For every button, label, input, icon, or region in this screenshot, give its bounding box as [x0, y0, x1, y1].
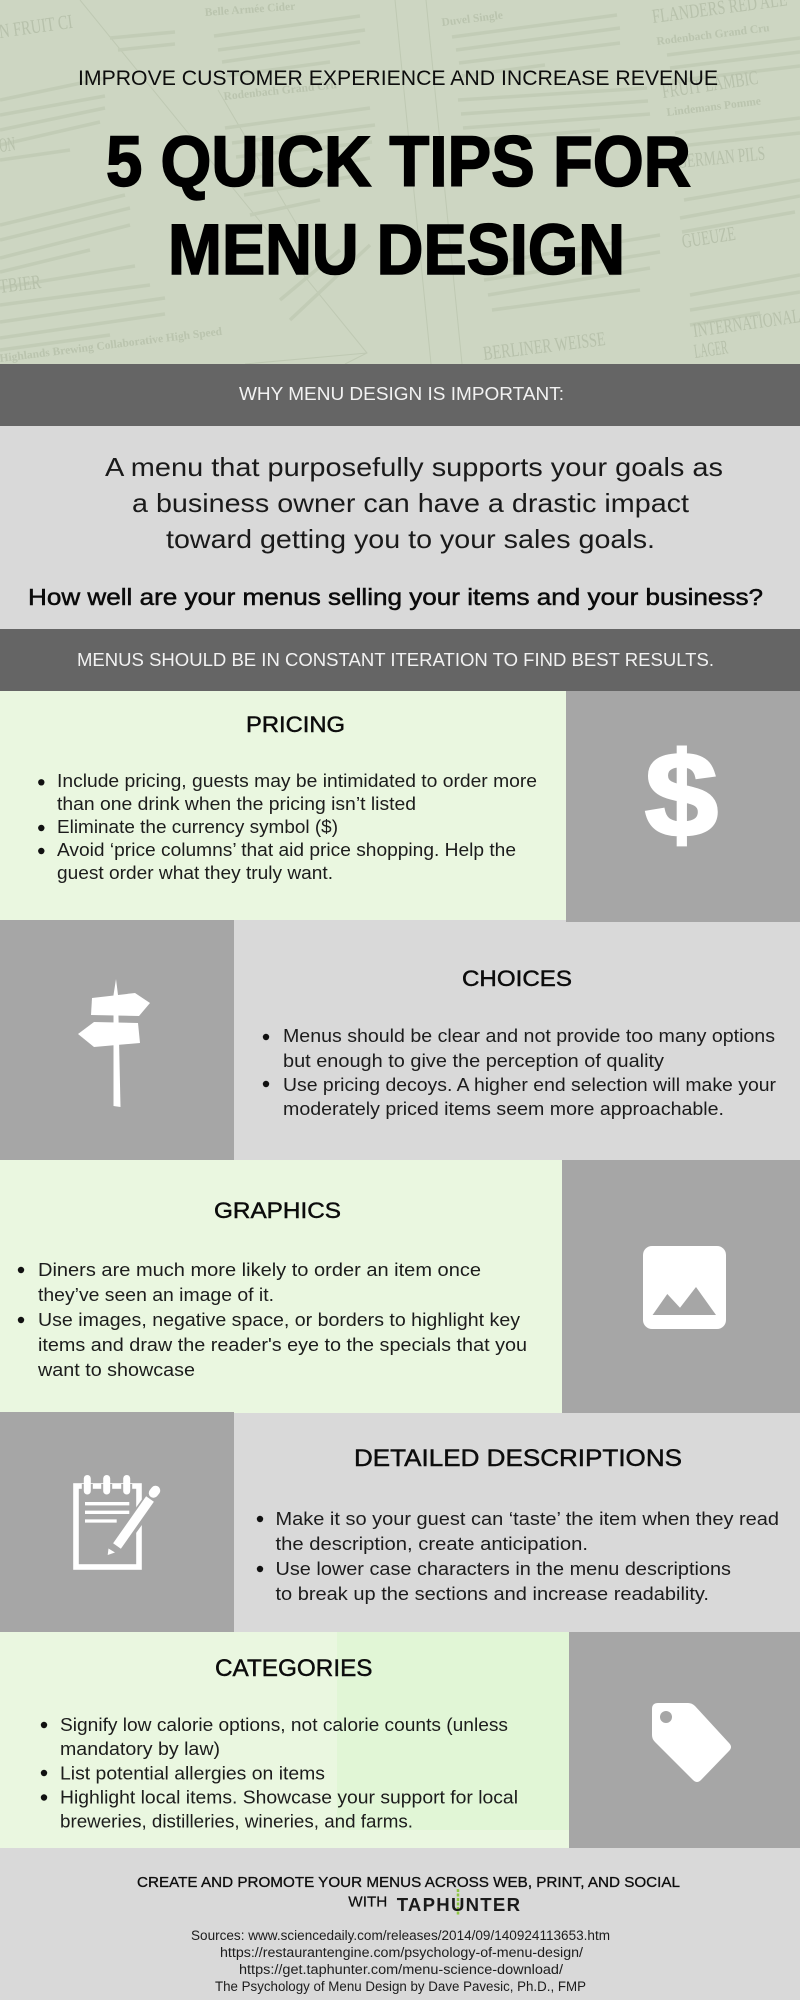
- pricing bullet list: Avoid ‘price columns’ that aid price shopping. Help the: [57, 839, 516, 860]
- detailed descriptions bullet list: the description, create anticipation.: [276, 1533, 588, 1554]
- menu photo background texture: BERLINER WEISSE: [482, 328, 607, 365]
- detailed descriptions bullet list: Make it so your guest can ‘taste’ the item when they read: [276, 1508, 779, 1529]
- graphics bullet list: they’ve seen an image of it.: [38, 1284, 274, 1305]
- icon: notepad and pencil: [76, 1478, 158, 1567]
- menu photo background texture: Highlands Brewing Collaborative High Speed: [0, 326, 223, 365]
- graphics bullet list: want to showcase: [37, 1359, 195, 1380]
- icon: dollar sign: $: [645, 728, 718, 862]
- banner: why menu design is important: WHY MENU DESIGN IS IMPORTANT:: [239, 383, 564, 404]
- categories bullet list: Signify low calorie options, not calorie counts (unless: [60, 1714, 508, 1735]
- panel: intro statement: [0, 426, 800, 629]
- pricing heading: PRICING: [246, 712, 345, 737]
- menu photo background texture: LAGER: [693, 336, 730, 363]
- pricing bullet list: guest order what they truly want.: [57, 862, 333, 883]
- menu photo background texture: GUEUZE: [680, 223, 737, 253]
- graphics bullet list: [18, 1259, 527, 1380]
- call to action: WITH: [348, 1895, 387, 1911]
- choices bullet list: but enough to give the perception of quality: [283, 1050, 665, 1071]
- panel: footer: [0, 1848, 800, 2000]
- intro paragraph: [105, 452, 723, 554]
- panel: categories icon: [569, 1632, 800, 1848]
- menu photo background texture: Rodenbach Grand Cru: [223, 79, 338, 103]
- choices heading: CHOICES: [462, 966, 572, 991]
- menu photo background texture: Lindemans Pomme: [666, 96, 762, 119]
- call to action: CREATE AND PROMOTE YOUR MENUS ACROSS WEB, PRINT, AND SOCIAL: [137, 1874, 680, 1891]
- panel: choices icon: [0, 920, 234, 1160]
- pricing bullet list: Eliminate the currency symbol ($): [57, 816, 338, 837]
- menu photo background texture: Duvel Single: [441, 10, 504, 29]
- banner: why menu design is important: [0, 364, 800, 426]
- graphics bullet list: Diners are much more likely to order an item once: [38, 1259, 481, 1280]
- hero title: MENU DESIGN: [168, 211, 625, 290]
- hero title: 5 QUICK TIPS FOR: [106, 123, 691, 202]
- panel: choices: [234, 922, 800, 1160]
- menu photo background texture: [0, 0, 800, 365]
- intro paragraph: A menu that purposefully supports your goals as: [105, 452, 723, 482]
- panel: detailed descriptions: [234, 1413, 800, 1632]
- sources: https://get.taphunter.com/menu-science-download/: [239, 1962, 563, 1977]
- banner: constant iteration: MENUS SHOULD BE IN CONSTANT ITERATION TO FIND BEST RESULTS.: [77, 649, 714, 670]
- detailed descriptions bullet list: Use lower case characters in the menu descriptions: [276, 1558, 731, 1579]
- hero subtitle: IMPROVE CUSTOMER EXPERIENCE AND INCREASE REVENUE: [78, 67, 718, 90]
- call to action: [137, 1874, 680, 1911]
- detailed descriptions bullet list: to break up the sections and increase readability.: [276, 1583, 709, 1604]
- hero title: [106, 123, 691, 290]
- panel: hero header: [0, 0, 800, 365]
- sources: https://restaurantengine.com/psychology-of-menu-design/: [220, 1945, 583, 1960]
- pricing bullet list: than one drink when the pricing isn’t listed: [57, 793, 416, 814]
- menu photo background texture: FRUIT LAMBIC: [660, 67, 760, 103]
- categories bullet list: Highlight local items. Showcase your support for local: [60, 1786, 518, 1808]
- choices bullet list: Menus should be clear and not provide too many options: [283, 1025, 775, 1046]
- icon: signpost: [78, 979, 150, 1107]
- choices bullet list: moderately priced items seem more approachable.: [283, 1098, 724, 1119]
- sources: The Psychology of Menu Design by Dave Pavesic, Ph.D., FMP: [215, 1979, 586, 1994]
- panel: descriptions icon: [0, 1412, 234, 1632]
- menu photo background texture: N FRUIT CI: [0, 11, 74, 43]
- graphics heading: GRAPHICS: [214, 1198, 341, 1223]
- icon: image placeholder: [643, 1246, 726, 1329]
- categories heading: CATEGORIES: [215, 1655, 372, 1682]
- detailed descriptions bullet list: [257, 1508, 779, 1604]
- panel: pricing icon: [566, 691, 800, 922]
- intro paragraph: a business owner can have a drastic impact: [132, 488, 690, 518]
- panel: pricing: [0, 691, 566, 920]
- intro paragraph: toward getting you to your sales goals.: [166, 524, 655, 554]
- icon: price tag: [652, 1703, 731, 1782]
- categories bullet list: [41, 1714, 518, 1832]
- banner: constant iteration: [0, 629, 800, 691]
- menu photo background texture: Belle Armée Cider: [204, 1, 296, 19]
- graphics bullet list: items and draw the reader's eye to the specials that you: [38, 1334, 527, 1355]
- detailed descriptions heading: DETAILED DESCRIPTIONS: [354, 1445, 682, 1472]
- pricing bullet list: Include pricing, guests may be intimidated to order more: [57, 770, 537, 791]
- choices bullet list: Use pricing decoys. A higher end selection will make your: [283, 1074, 776, 1095]
- pricing bullet list: [38, 770, 537, 883]
- menu photo background texture: Rodenbach Grand Cru: [656, 22, 771, 48]
- logo: Taphunter: TAPHUNTER: [397, 1894, 521, 1915]
- panel: graphics: [0, 1160, 562, 1413]
- graphics bullet list: Use images, negative space, or borders to highlight key: [38, 1309, 521, 1330]
- panel: graphics icon: [562, 1160, 800, 1414]
- sources: Sources: www.sciencedaily.com/releases/2014/09/140924113653.htm: [191, 1928, 610, 1943]
- categories bullet list: breweries, distilleries, wineries, and farms.: [60, 1810, 413, 1832]
- categories bullet list: List potential allergies on items: [60, 1762, 325, 1784]
- intro question: How well are your menus selling your items and your business?: [28, 584, 763, 610]
- panel: categories: [0, 1632, 569, 1848]
- categories bullet list: mandatory by law): [60, 1738, 220, 1759]
- sources: [191, 1928, 610, 1994]
- choices bullet list: [263, 1025, 776, 1119]
